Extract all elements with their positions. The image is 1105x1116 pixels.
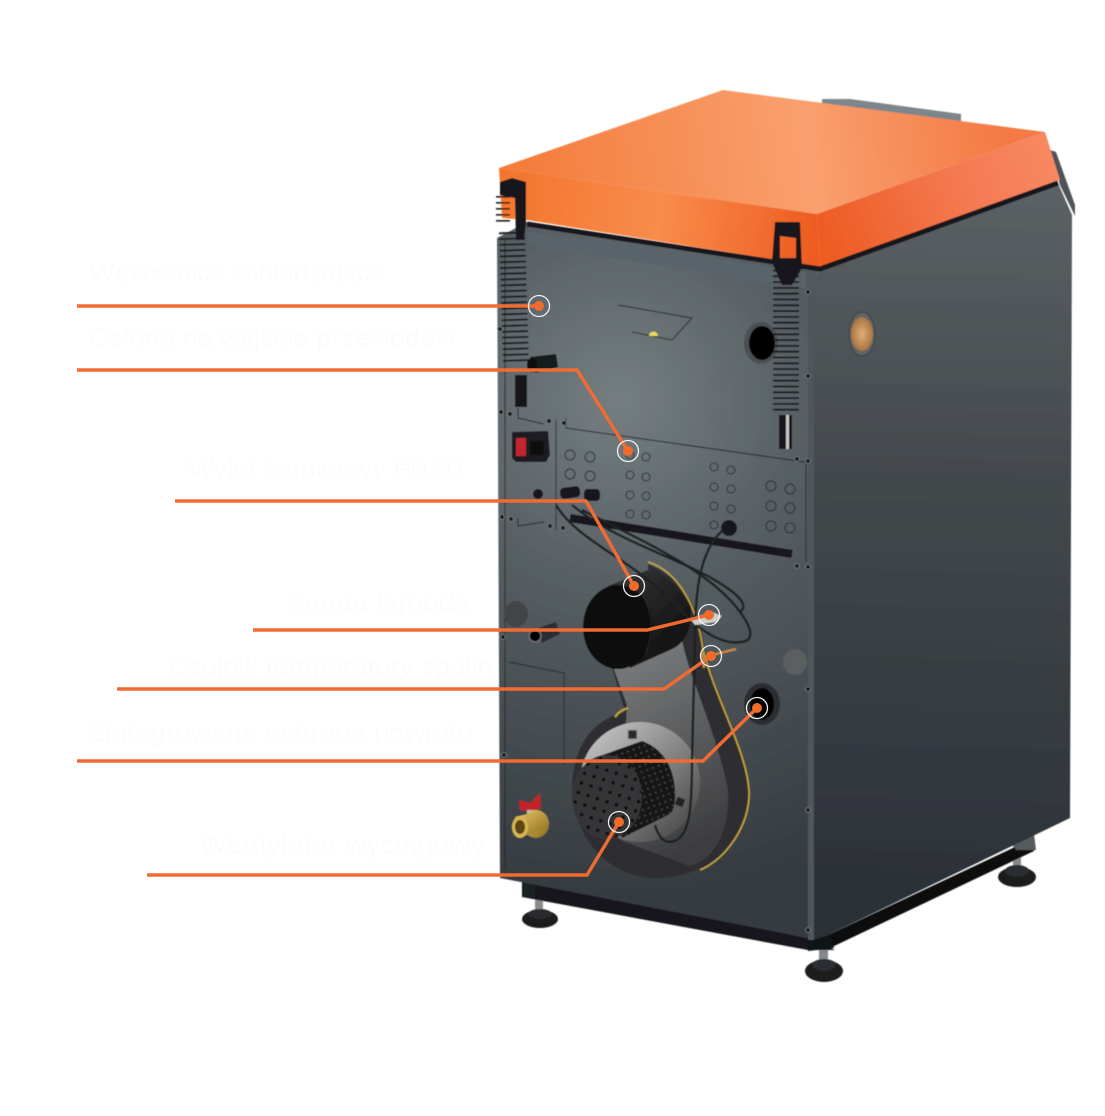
plugs — [504, 601, 807, 675]
callout 1: cooling coil: Wężownica schładzająca — [90, 259, 385, 287]
box behind the lid — [822, 99, 961, 122]
callout 7: exhaust fan — [147, 812, 630, 875]
spring: right — [773, 258, 799, 412]
base rails — [522, 834, 1036, 951]
left upper pipe — [515, 354, 558, 407]
black cable strip — [570, 518, 792, 554]
latch: right — [772, 222, 802, 449]
small connectors — [533, 486, 737, 536]
fan disc — [580, 722, 700, 842]
power socket — [512, 431, 550, 462]
callout 5: flue gas temperature sensor — [117, 646, 722, 689]
lid — [499, 90, 1060, 269]
foot: left — [522, 896, 558, 928]
fan volute — [572, 562, 749, 878]
temperature sensor — [702, 649, 736, 668]
foot: right — [998, 845, 1036, 887]
callout 4: lambda probe: Sonda lambda — [285, 590, 470, 618]
panel seams — [505, 240, 806, 870]
copper plug — [849, 312, 875, 356]
corner strip — [808, 288, 814, 940]
cables — [556, 505, 750, 842]
boiler — [497, 90, 1075, 982]
back panel upper band — [527, 232, 806, 288]
rear chamfer piece — [1050, 150, 1075, 216]
ball valve — [512, 793, 549, 838]
knockout circles — [565, 450, 795, 533]
callout 5: flue gas temperature sensor: Czujnik temperatury spalin — [168, 653, 493, 681]
screws — [498, 290, 810, 932]
callout 7: exhaust fan: Wentylator wyciągowy — [200, 831, 486, 859]
foot: front — [805, 945, 843, 982]
callout 3: flue outlet: Wylot kominowy Fi150 — [188, 455, 462, 483]
spring: left — [503, 196, 516, 362]
callout 4: lambda probe — [253, 590, 720, 630]
lower right opening — [744, 683, 780, 725]
hatch marking with yellow dot — [649, 332, 658, 336]
flue duct — [583, 570, 691, 669]
callout 2: cable exit cover: Osłona na wyjście przewodów — [88, 324, 456, 352]
latch: left — [500, 178, 526, 240]
round opening upper right — [744, 322, 778, 364]
back panel — [497, 222, 820, 940]
perforated fan cylinder — [572, 741, 685, 839]
callout 3: flue outlet — [175, 455, 644, 596]
callout 6: integrated return protection: Zintegrowana ochrona powrotu — [88, 719, 473, 747]
callout 6: integrated return protection — [77, 698, 768, 761]
callout 1: cooling coil — [77, 259, 550, 316]
callout 2: cable exit cover — [77, 324, 638, 462]
side pipe — [529, 622, 560, 643]
side panel — [812, 181, 1072, 940]
lambda probe — [690, 612, 722, 625]
